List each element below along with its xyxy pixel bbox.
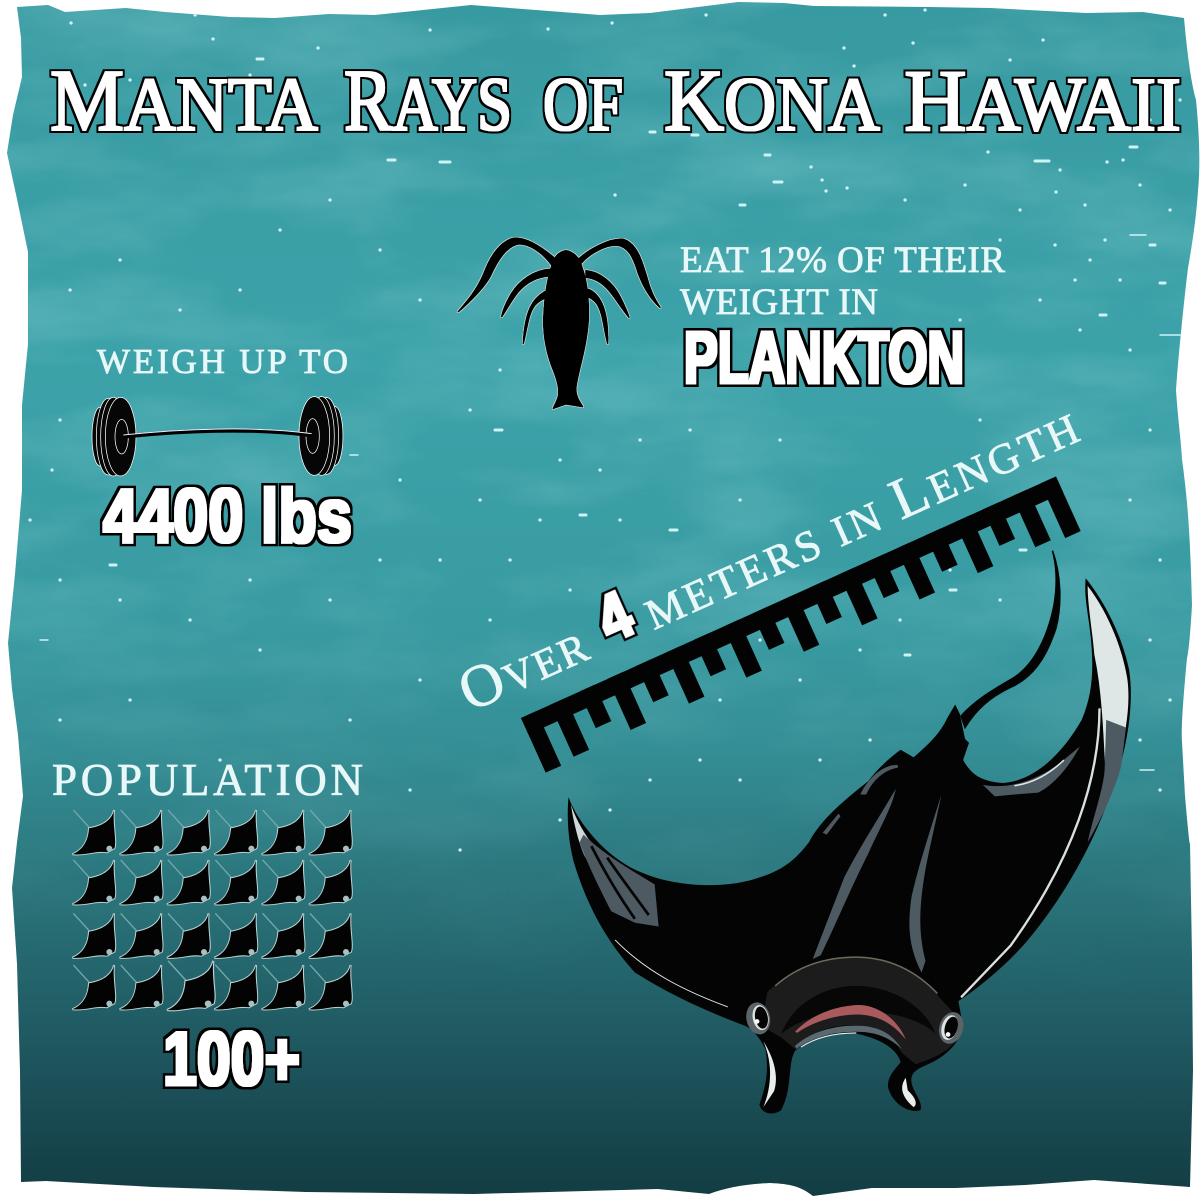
icon grid: manta rays [72, 810, 352, 1010]
body and wings [568, 578, 1131, 1113]
plankton caption [680, 240, 1005, 323]
title: RAYS [344, 53, 512, 150]
population value: 100+ [163, 1017, 300, 1102]
plankton word: PLANKTON [684, 316, 964, 399]
illustration: manta ray [568, 551, 1131, 1113]
mouth [795, 1005, 906, 1049]
title: KONA [664, 53, 880, 150]
cephalic lobes [763, 1041, 916, 1107]
icon: plankton [458, 238, 660, 408]
title: MANTA [50, 53, 318, 150]
head [761, 957, 955, 1064]
weight value: 4400 lbs [103, 474, 352, 559]
length label: METERS IN LENGTH [632, 392, 1087, 642]
weigh block [92, 342, 352, 559]
title: HAWAII [904, 53, 1181, 150]
length label: 4 [586, 576, 643, 656]
plankton caption: EAT 12% OF THEIR [680, 240, 1005, 281]
population block [52, 755, 363, 1102]
title: OF [543, 63, 623, 147]
right wing highlights [961, 586, 1128, 997]
left wing highlights [571, 804, 728, 1007]
weigh heading: WEIGH UP TO [97, 342, 348, 381]
plankton block [458, 238, 1005, 408]
length label: OVER [448, 609, 597, 724]
ruler [521, 476, 1081, 773]
water specks [30, 10, 1182, 850]
population heading: POPULATION [52, 755, 363, 805]
title [50, 53, 1181, 150]
tail [961, 551, 1060, 728]
body highlights [813, 765, 941, 972]
length label [443, 379, 1087, 724]
eyes [744, 1001, 967, 1046]
icon: barbell [92, 397, 343, 476]
plankton caption: WEIGHT IN [680, 282, 878, 323]
